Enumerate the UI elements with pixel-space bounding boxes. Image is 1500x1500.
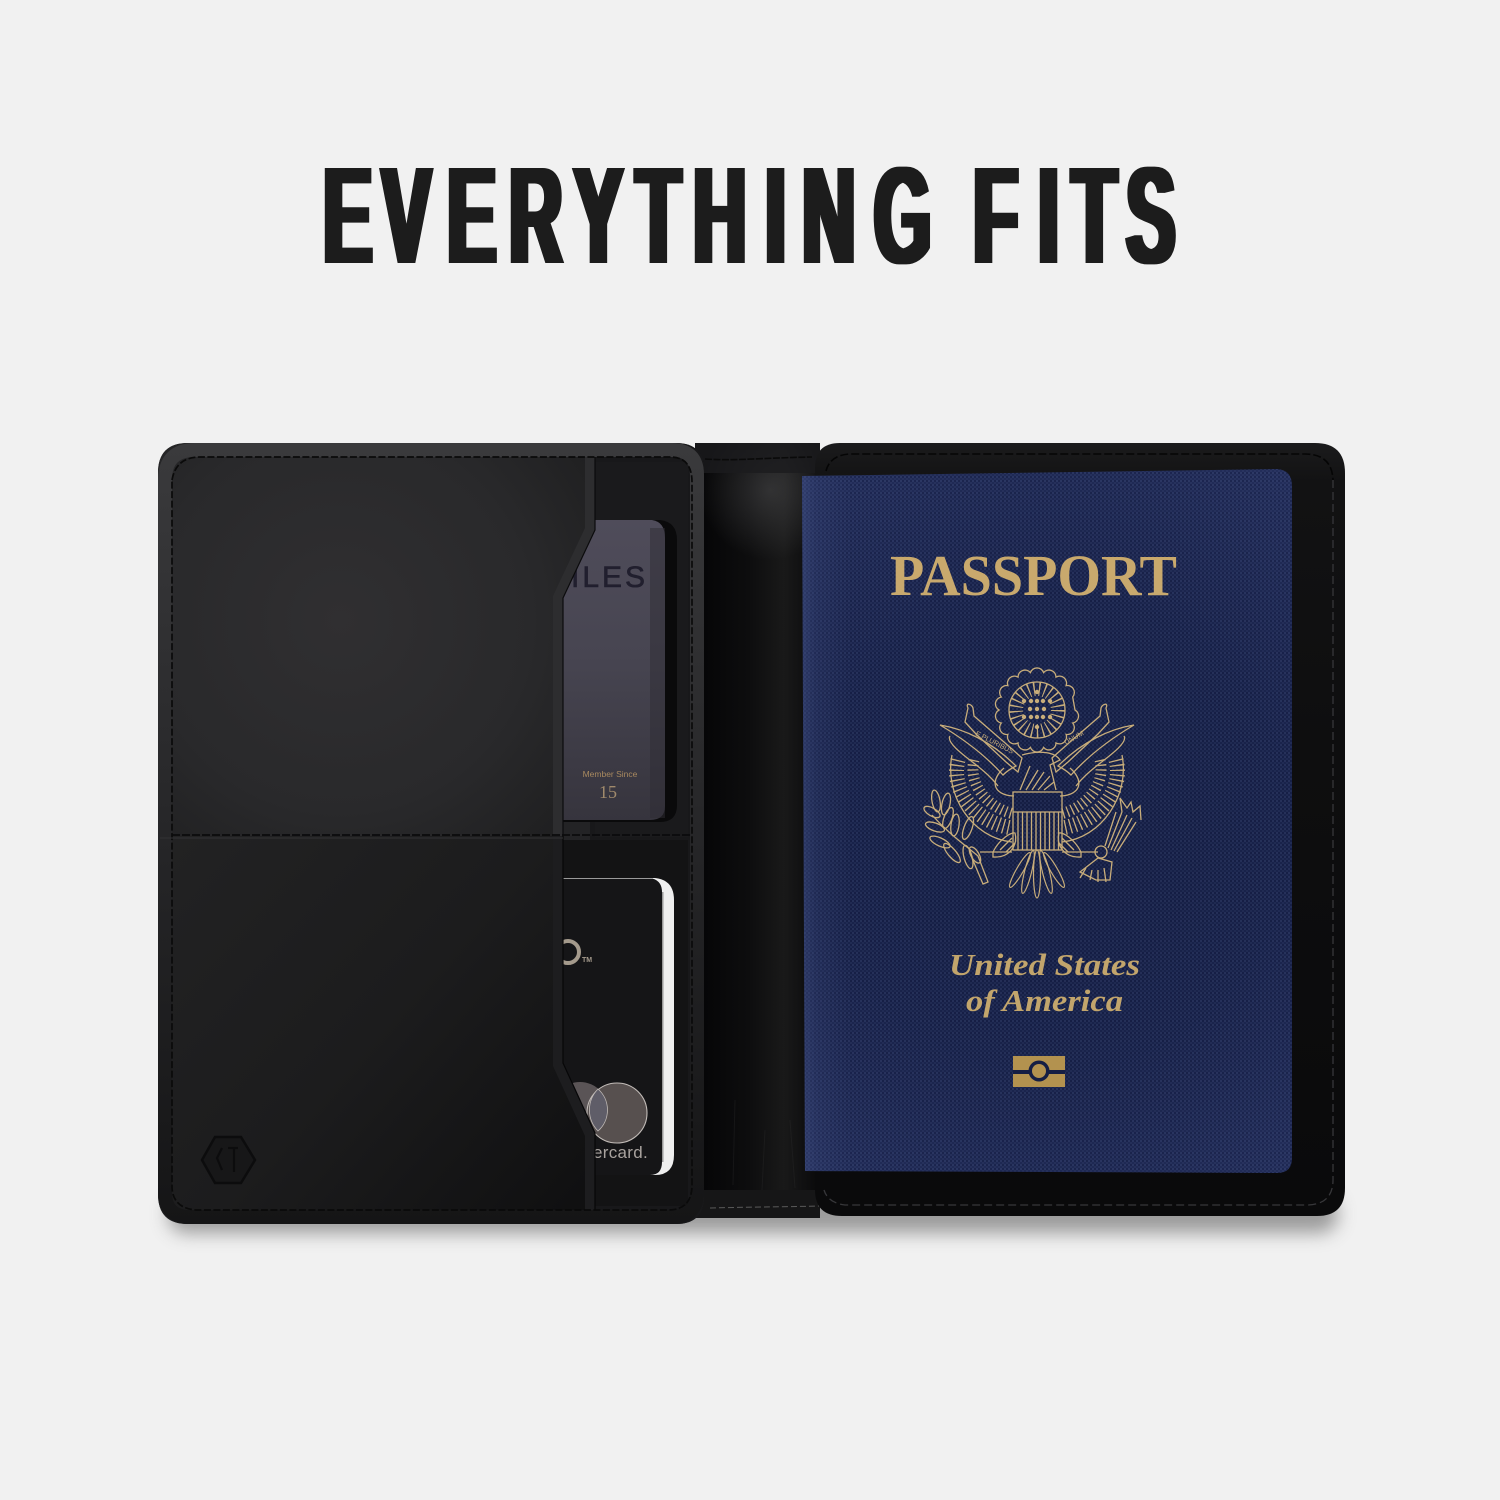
panel: spine (695, 443, 820, 1218)
passport cover (802, 469, 1292, 1173)
passport title: PASSPORT (890, 543, 1177, 608)
card: Miles membership card (564, 520, 677, 822)
arrow bundle (1080, 798, 1141, 882)
icon: hexagon logo (202, 1137, 255, 1183)
panel: right cover (815, 443, 1345, 1216)
passport emblem: great seal eagle (922, 668, 1141, 898)
line one: United States (949, 947, 1140, 982)
panel: passport (802, 469, 1292, 1173)
talons and legs (980, 833, 1098, 857)
wallet drop shadow (168, 1195, 1338, 1233)
title: EVERYTHING FITS (323, 139, 1175, 293)
biometric chip symbol (1013, 1056, 1065, 1087)
infographic canvas (158, 166, 1348, 1244)
card text: MILES: MILES (543, 561, 648, 594)
tail feathers (1007, 850, 1067, 898)
seal crest (995, 668, 1079, 752)
card text: mastercard: mastercard. (555, 1143, 648, 1162)
stitching: left cover (160, 450, 697, 1217)
card logo ring (557, 941, 579, 963)
panel: left cover (158, 443, 704, 1224)
card: black payment card (564, 878, 674, 1175)
mastercard circles (572, 1082, 648, 1144)
olive branch (922, 789, 988, 884)
card text: year: 15 (599, 782, 617, 802)
left wing (940, 704, 1022, 842)
shield (1013, 792, 1062, 850)
line two: of America (966, 983, 1123, 1018)
panel: bottom pocket (158, 836, 595, 1224)
passport country name (949, 947, 1140, 1018)
right wing (1052, 704, 1134, 842)
card text: member since: Member Since (583, 769, 638, 779)
stitching: right cover side and bottom (824, 480, 1333, 1205)
panel: top pocket (158, 443, 595, 838)
scroll motto right: UNUM (1064, 730, 1085, 747)
scroll motto left: E PLURIBUS (974, 731, 1015, 756)
open wallet (158, 443, 1345, 1224)
eagle head and neck (1020, 752, 1060, 790)
stitching: right cover top (826, 454, 1333, 480)
card trademark: TM (582, 957, 592, 964)
